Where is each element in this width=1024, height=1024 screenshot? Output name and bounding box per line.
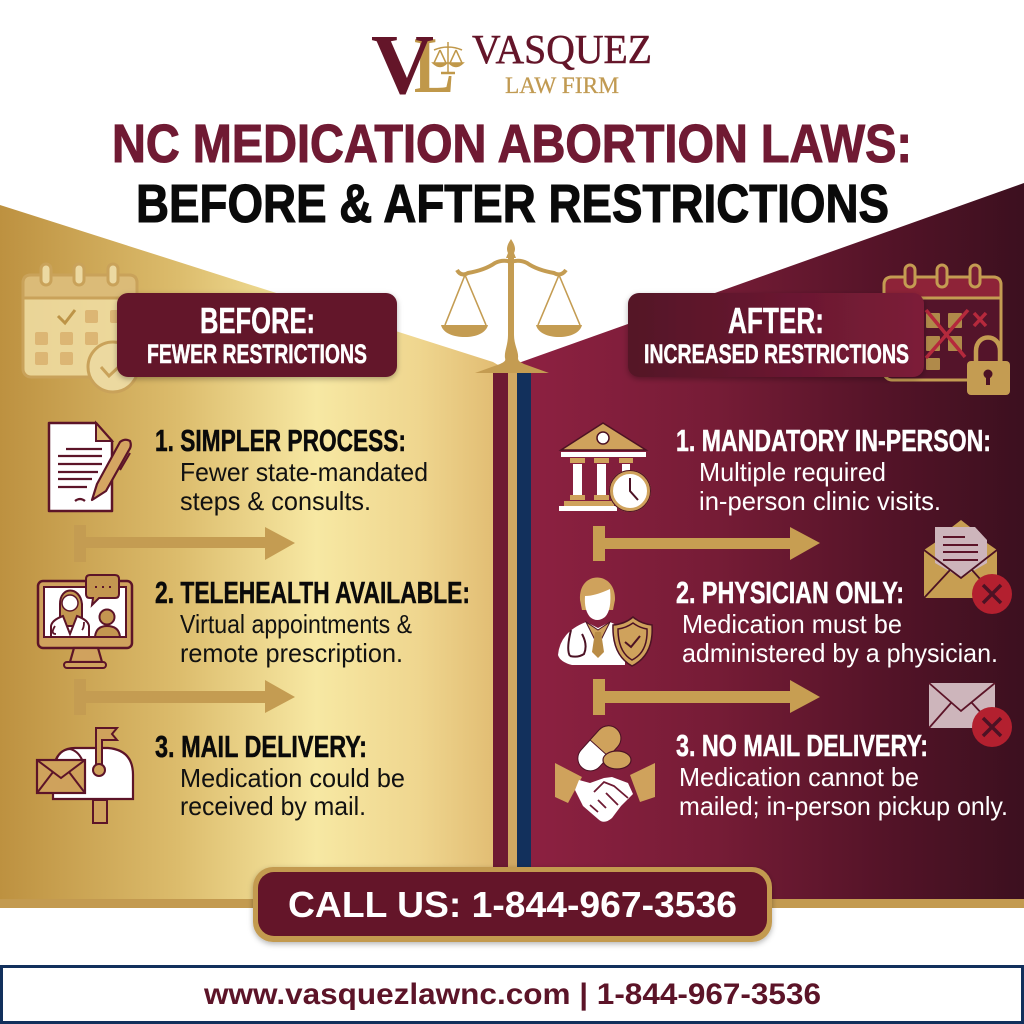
- icon: pills and handshake: [555, 721, 655, 822]
- logo: [371, 16, 652, 112]
- gold base strip: [0, 899, 1024, 908]
- arrow: before 1: [74, 525, 295, 562]
- logo subtitle: LAW FIRM: [505, 73, 619, 98]
- panel: before background: [0, 205, 510, 900]
- logo name: VASQUEZ: [472, 26, 652, 72]
- call to action text: CALL US: 1-844-967-3536: [288, 884, 737, 925]
- item: no mail delivery: mailed; in-person pickup only.: [679, 791, 1008, 821]
- logo monogram V: V: [371, 16, 434, 112]
- icon: x badge: [972, 707, 1012, 747]
- title line 1: NC MEDICATION ABORTION LAWS:: [112, 114, 912, 174]
- icon: faded calendar with check: [23, 264, 138, 392]
- item: telehealth available: Virtual appointments &: [180, 609, 412, 639]
- after label: AFTER:: [728, 300, 824, 341]
- panel: before heading: [117, 293, 397, 377]
- icon: telehealth monitor: [38, 575, 132, 668]
- item: mandatory in-person: in-person clinic visits.: [699, 486, 941, 516]
- item: mandatory in-person: Multiple required: [699, 457, 886, 487]
- before sublabel: FEWER RESTRICTIONS: [147, 339, 367, 369]
- item: mail delivery: received by mail.: [180, 791, 366, 821]
- icon: mailbox: [37, 728, 133, 823]
- item: telehealth available: [155, 575, 470, 668]
- before label: BEFORE:: [200, 300, 315, 341]
- icon: doctor with shield: [558, 578, 652, 666]
- item: physician only: 2. PHYSICIAN ONLY:: [676, 575, 904, 610]
- item: simpler process: steps & consults.: [180, 486, 371, 516]
- item: simpler process: Fewer state-mandated: [180, 457, 428, 487]
- item: no mail delivery: Medication cannot be: [679, 762, 919, 792]
- icon: document and pen: [49, 423, 131, 511]
- icon: closed envelope rejected: [929, 683, 1012, 747]
- arrow: after 2: [593, 679, 820, 715]
- item: physician only: [676, 575, 998, 668]
- item: mail delivery: [155, 729, 405, 821]
- call to action button: [253, 867, 772, 942]
- panel: after background: [510, 183, 1024, 900]
- panel: after heading: [628, 293, 924, 377]
- icon: open envelope rejected: [924, 520, 1012, 614]
- item: telehealth available: remote prescription.: [180, 638, 403, 668]
- item: physician only: Medication must be: [682, 609, 902, 639]
- item: simpler process: [155, 423, 428, 516]
- arrow: after 1: [593, 526, 820, 561]
- logo monogram L: L: [414, 22, 454, 110]
- title: [112, 114, 912, 234]
- item: mandatory in-person: [676, 423, 991, 516]
- item: telehealth available: 2. TELEHEALTH AVAILABLE:: [155, 575, 470, 610]
- icon: x badge: [972, 574, 1012, 614]
- item: mail delivery: 3. MAIL DELIVERY:: [155, 729, 367, 764]
- title line 2: BEFORE & AFTER RESTRICTIONS: [136, 174, 889, 234]
- item: physician only: administered by a physician.: [682, 638, 998, 668]
- icon: courthouse with clock: [559, 423, 650, 512]
- after sublabel: INCREASED RESTRICTIONS: [644, 339, 909, 369]
- arrow: before 2: [74, 679, 295, 715]
- icon: scales of justice: [441, 239, 582, 373]
- item: mail delivery: Medication could be: [180, 763, 405, 793]
- icon: padlock: [967, 338, 1010, 395]
- icon: locked calendar: [884, 265, 1010, 395]
- item: no mail delivery: 3. NO MAIL DELIVERY:: [676, 728, 928, 763]
- center divider stripes: [493, 372, 531, 872]
- footer contact text: www.vasquezlawnc.com | 1-844-967-3536: [203, 978, 821, 1011]
- footer bar: [2, 966, 1022, 1022]
- logo mini scales: [433, 42, 463, 73]
- item: no mail delivery: [676, 728, 1008, 821]
- item: simpler process: 1. SIMPLER PROCESS:: [155, 423, 406, 458]
